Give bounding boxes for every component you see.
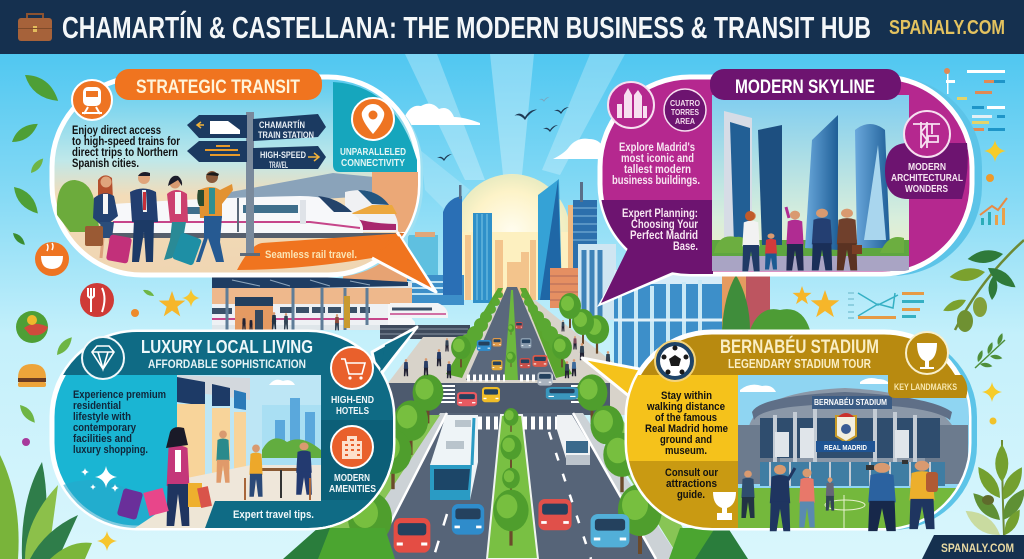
icon: location pin xyxy=(352,98,394,140)
transit description: Spanish cities. xyxy=(72,158,139,170)
transit description: direct trips to Northern xyxy=(72,147,178,159)
stadium description xyxy=(645,390,728,457)
luxury description: luxury shopping. xyxy=(73,444,148,456)
icon: diamond xyxy=(82,337,124,379)
amenities badge: MODERN xyxy=(334,472,370,484)
right mid buildings xyxy=(614,270,810,372)
hotels badge: HIGH-END xyxy=(331,394,374,406)
transit description: Enjoy direct access xyxy=(72,125,161,137)
trophy badge and key landmarks: KEY LANDMARKS xyxy=(894,382,957,392)
stadium description: walking distance xyxy=(646,401,725,413)
amenities badge xyxy=(329,426,376,495)
planning note: Perfect Madrid xyxy=(630,230,698,242)
stadium description: of the famous xyxy=(655,412,717,424)
cuatro torres badge xyxy=(664,89,706,131)
icon: football xyxy=(655,341,695,381)
luxury description: contemporary xyxy=(73,422,137,434)
architecture badge xyxy=(885,111,968,199)
panel: bernabeu stadium: BERNABÉU STADIUM xyxy=(814,397,887,407)
panel: modern skyline xyxy=(595,69,982,307)
planning note xyxy=(622,208,698,253)
planning note: Expert Planning: xyxy=(622,208,698,220)
skyline description: tallest modern xyxy=(624,164,691,176)
stadium description: ground and xyxy=(660,434,712,446)
second train xyxy=(345,190,398,232)
planning note: Base. xyxy=(673,241,698,253)
olive branch top right xyxy=(941,240,1024,332)
connectivity label xyxy=(340,147,406,169)
skyline description: Explore Madrid's xyxy=(619,142,695,154)
main train xyxy=(113,196,363,233)
skyline visitors xyxy=(742,207,862,271)
rail caption: Seamless rail travel. xyxy=(265,249,357,261)
connectivity label: CONNECTIVITY xyxy=(341,158,405,169)
sparkles xyxy=(81,466,119,492)
attractions note: Consult our xyxy=(665,467,719,479)
icon: skyscrapers xyxy=(608,82,654,128)
planning note: Choosing Your xyxy=(631,219,698,231)
travellers xyxy=(85,171,233,266)
shopping scene xyxy=(117,375,321,526)
icon: train xyxy=(72,80,112,120)
bottom tree patches xyxy=(283,528,748,559)
real madrid crest and banner xyxy=(816,413,875,452)
luxury description xyxy=(73,389,166,456)
teal connectivity panel xyxy=(333,82,417,172)
central boulevard scene xyxy=(300,287,700,559)
olive plant bottom right xyxy=(961,440,1024,541)
signpost: CHAMARTÍN xyxy=(259,120,305,130)
attractions note: attractions xyxy=(666,478,717,490)
cuatro torres badge: CUATRO xyxy=(670,99,700,108)
left decorative icons xyxy=(9,69,200,551)
right decorative icons xyxy=(792,68,1007,424)
stadium building xyxy=(738,388,968,486)
travel tips caption: Expert travel tips. xyxy=(233,509,314,521)
panel: luxury local living xyxy=(50,327,417,530)
skyline description: most iconic and xyxy=(621,153,694,165)
luxury description: lifestyle with xyxy=(73,411,131,423)
bottom-left foliage xyxy=(0,455,92,559)
central skyline and sun rays xyxy=(404,54,625,320)
architecture badge: MODERN xyxy=(908,161,946,173)
luxury heading xyxy=(141,337,313,371)
stadium heading xyxy=(720,336,879,371)
luxury description: facilities and xyxy=(73,433,132,445)
hotels badge xyxy=(331,347,374,417)
luxury description: Experience premium xyxy=(73,389,166,401)
station and train xyxy=(212,262,470,339)
vehicles xyxy=(394,322,629,553)
transit description xyxy=(72,125,180,170)
stadium heading: BERNABÉU STADIUM xyxy=(720,336,879,358)
trophy badge and key landmarks xyxy=(888,332,967,398)
transit description: to high-speed trains for xyxy=(72,136,180,148)
stadium description: Stay within xyxy=(661,390,712,402)
icon: trophy xyxy=(713,492,736,520)
luxury heading: LUXURY LOCAL LIVING xyxy=(141,337,313,357)
stadium description: museum. xyxy=(665,445,707,457)
signpost: TRAVEL xyxy=(269,160,288,170)
stadium heading: LEGENDARY STADIUM TOUR xyxy=(728,357,871,371)
attractions note xyxy=(665,467,719,501)
cuatro torres badge: TORRES xyxy=(671,108,700,117)
heading pill xyxy=(115,69,322,100)
signpost xyxy=(187,112,326,256)
architecture badge: WONDERS xyxy=(905,183,948,195)
attractions note: guide. xyxy=(677,489,705,501)
real madrid crest and banner: REAL MADRID xyxy=(824,443,867,452)
header bar xyxy=(0,0,1024,54)
stadium description: Real Madrid home xyxy=(645,423,728,435)
hotels badge: HOTELS xyxy=(336,405,369,417)
icon: briefcase xyxy=(18,14,52,41)
footer badge xyxy=(922,535,1024,559)
cuatro torres badge: AREA xyxy=(675,117,695,126)
heading pill: STRATEGIC TRANSIT xyxy=(136,77,300,98)
panel: bernabeu stadium xyxy=(582,332,977,531)
skyline description: business buildings. xyxy=(612,175,700,187)
cuatro torres towers xyxy=(714,111,904,253)
stadium visitors xyxy=(741,460,938,531)
signpost: HIGH-SPEED xyxy=(260,150,306,160)
fern sprig xyxy=(975,332,1005,368)
footer badge: SPANALY.COM xyxy=(941,543,1014,555)
heading pill xyxy=(710,69,901,100)
skyline description xyxy=(612,142,700,187)
luxury description: residential xyxy=(73,400,121,412)
architecture badge: ARCHITECTURAL xyxy=(891,172,963,184)
panel: strategic transit xyxy=(52,69,440,295)
signpost: TRAIN STATION xyxy=(258,130,314,140)
luxury heading: AFFORDABLE SOPHISTICATION xyxy=(148,357,306,371)
connectivity label: UNPARALLELED xyxy=(340,147,406,158)
amenities badge: AMENITIES xyxy=(329,483,376,495)
heading pill: MODERN SKYLINE xyxy=(735,77,875,98)
